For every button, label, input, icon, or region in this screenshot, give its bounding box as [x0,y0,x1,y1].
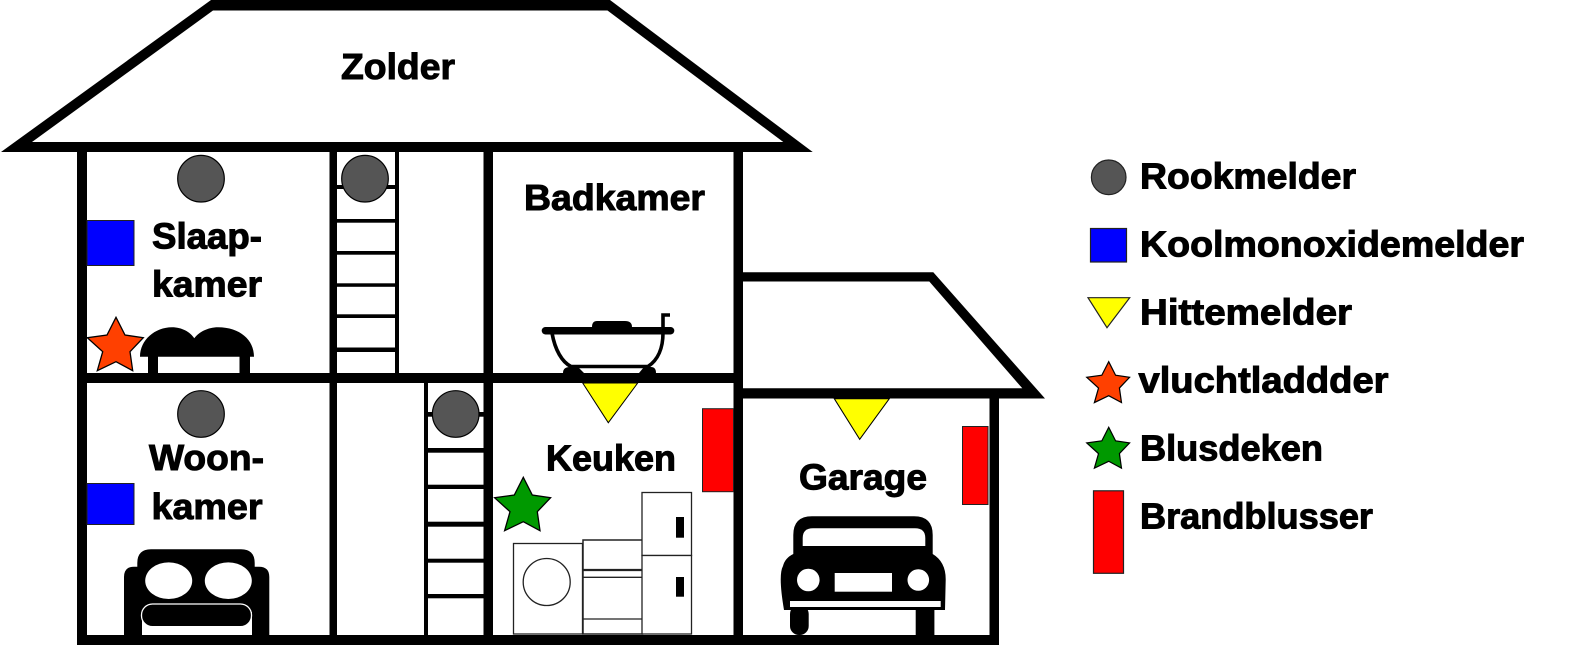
washing machine [514,544,582,634]
legend item: Rookmelder: Rookmelder [1140,155,1356,196]
room label: Woonkamer [149,437,264,527]
carbon monoxide detector: living room [87,484,134,524]
room label: Woonkamer: Woon- [149,437,264,478]
fire blanket star: kitchen [495,477,551,531]
smoke detector: upper ladder [342,155,388,202]
legend [1087,155,1524,573]
room label: Woonkamer: kamer [152,486,262,527]
upper ladder [333,150,399,374]
room label: Garage: Garage [799,456,927,497]
legend item: Koolmonoxidemelder: Koolmonoxidemelder [1140,224,1524,265]
lower ladder [424,380,486,636]
heat detector: kitchen [583,383,638,423]
first floor slab [77,373,737,383]
legend item: Blusdeken: Blusdeken [1140,428,1323,469]
room label: Slaapkamer: Slaap- [152,215,262,256]
ground floor slab [77,635,999,645]
legend item: Brandblusser [1094,491,1373,573]
room label: Slaapkamer: kamer [152,264,262,305]
room label: Badkamer: Badkamer [524,177,705,218]
room label: Zolder: Zolder [341,46,455,87]
carbon monoxide detector: bedroom [87,220,134,266]
garage roof [740,272,1045,398]
smoke detector: lower ladder [432,391,479,437]
main roof [1,0,813,152]
stove [583,540,642,634]
fridge [642,492,692,634]
smoke detector: bedroom [178,155,224,202]
inner wall one [330,150,337,640]
fire extinguisher: kitchen [702,409,734,492]
icon: car [781,516,946,635]
fire extinguisher: garage [962,426,988,504]
wall between main house and garage [734,150,743,640]
icon: bed [140,327,254,374]
heat detector: garage [834,399,889,439]
smoke detector: living room [178,391,224,437]
legend item: Hittemelder: Hittemelder [1140,291,1352,332]
house structure [1,0,1045,645]
legend item: vluchtladdder: vluchtladdder [1138,359,1388,400]
escape ladder star: bedroom [87,317,143,371]
inner wall two [484,150,493,640]
left outer wall [77,150,87,645]
icon: sofa [124,549,269,635]
garage right wall [990,395,999,645]
icon: kitchen appliances [514,492,692,634]
room label: Keuken: Keuken [546,438,676,479]
legend item: Brandblusser: Brandblusser [1140,495,1373,536]
icon: bathtub [542,315,674,373]
room label: Slaapkamer [152,215,262,305]
